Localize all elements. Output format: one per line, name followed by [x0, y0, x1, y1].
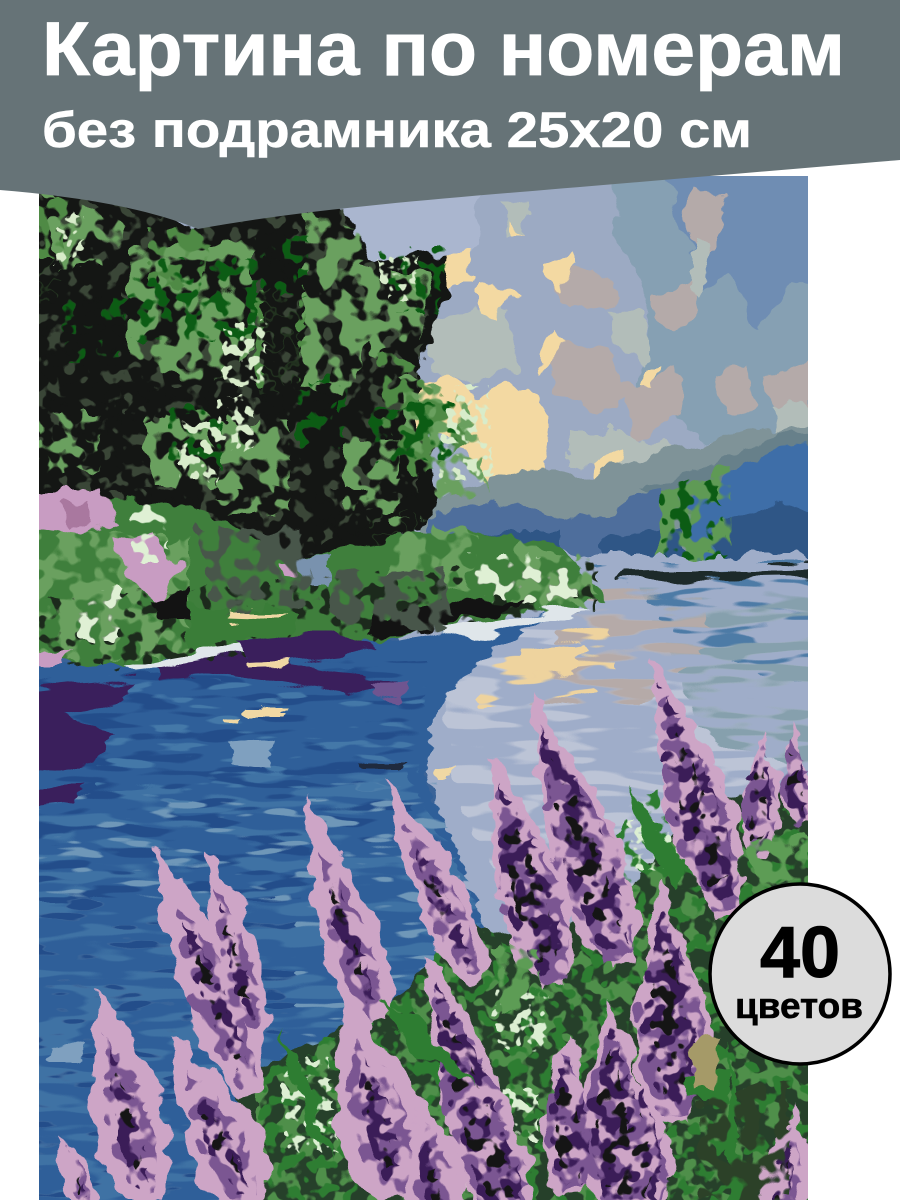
subtitle: без подрамника 25х20 см [42, 102, 752, 158]
lupin spikes: back row [123, 645, 818, 1106]
distant hills [420, 426, 808, 562]
header banner [0, 0, 900, 229]
tree mass [39, 194, 494, 560]
clouds [405, 190, 810, 490]
tree: light green foliage [40, 195, 490, 515]
left bushes with pink flowers [20, 490, 610, 672]
painting base [61, 638, 464, 883]
badge: 40 colours: 40 [760, 913, 840, 993]
bottom foliage [240, 790, 840, 1200]
water: deep blue left side [20, 605, 570, 1200]
lupin spikes: front row [45, 877, 823, 1200]
sky [176, 176, 808, 535]
water: dark purple shadow [30, 655, 455, 1060]
title: Картина по номерам [42, 7, 845, 92]
badge: 40 colours: цветов [735, 985, 863, 1026]
badge: 40 colours [710, 884, 890, 1064]
water: light right side [398, 548, 808, 935]
painting: lake landscape with lupins [39, 176, 808, 1200]
leaves in front of spikes [280, 785, 810, 1200]
